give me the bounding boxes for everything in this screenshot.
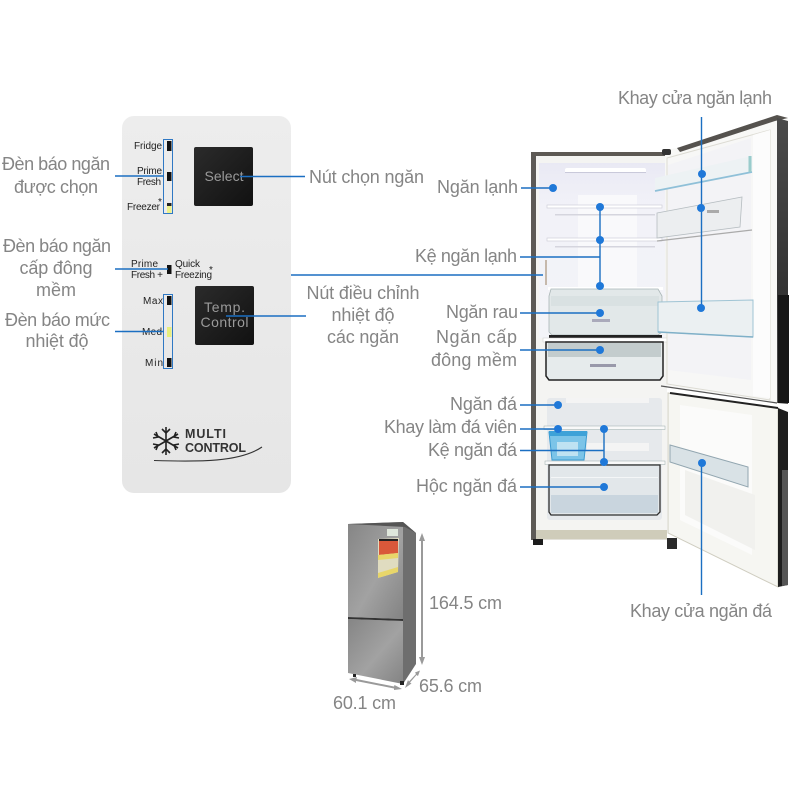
panel labels: compartments [127,141,162,213]
button: Temp. Control: Control [200,314,248,330]
callout: soft freeze indicator: Đèn báo ngăn [3,236,111,256]
callout: fridge door bins: Khay cửa ngăn lạnh [618,88,772,108]
callout: temperature level indicator: nhiệt độ [26,331,88,351]
callout: freezer door bin [630,459,773,621]
callout: vegetable drawer [446,302,604,322]
callout: freezer drawer: Hộc ngăn đá [416,476,518,496]
arrow: depth [405,670,420,688]
callout: freezer compartment [450,394,562,414]
panel labels: prime fresh plus and quick freezing: Fresh + [131,270,163,281]
panel labels: prime fresh plus and quick freezing [131,259,213,281]
panel labels: temperature levels: Max [143,296,163,307]
logo: multi control: MULTI [185,427,226,441]
panel labels: compartments: Freezer [127,202,161,213]
fridge body [531,152,677,549]
logo: multi control [153,427,262,461]
callout: fridge compartment: Ngăn lạnh [437,177,518,197]
callout: temperature level indicator [5,310,164,351]
panel labels: compartments: Prime [137,166,162,177]
label: width: 60.1 cm [333,693,396,713]
small fridge with dimensions [333,522,502,713]
callout: freezer shelves [428,425,608,466]
callout: selected compartment indicator [2,154,164,197]
upper door [661,115,789,404]
callout: ice tray: Khay làm đá viên [384,417,517,437]
prime fresh drawer [543,338,667,380]
panel labels: compartments: Fresh [137,177,161,188]
callout: select button: Nút chọn ngăn [309,167,424,187]
panel labels: prime fresh plus and quick freezing: Freezing [175,270,212,281]
lower door [668,393,788,587]
product sticker [378,529,399,578]
open fridge [531,115,789,587]
callout: vegetable drawer: Ngăn rau [446,302,518,322]
panel: control panel [122,116,291,493]
callout: soft freeze drawer [431,327,604,370]
callout: soft freeze drawer: Ngăn cấp [436,327,517,347]
callout: freezer door bin: Khay cửa ngăn đá [630,601,773,621]
ice drawer [549,465,660,515]
callout: temperature button: Nút điều chỉnh [306,283,420,303]
callout: freezer compartment: Ngăn đá [450,394,518,414]
callout: soft freeze drawer: đông mềm [431,350,517,370]
callout: soft freeze indicator: mềm [36,280,76,300]
indicator lights [167,141,172,367]
door bin: bottom [658,300,753,337]
indicator frames [164,140,172,368]
button: Select: Select [204,168,244,184]
door bin: freezer [670,445,748,487]
button: Temp. Control [195,286,254,345]
vegetable drawer [549,289,662,338]
panel labels: prime fresh plus and quick freezing: Quick [175,259,201,270]
panel labels: compartments: Fridge [134,141,162,152]
logo: multi control: CONTROL [185,441,246,455]
panel labels: temperature levels: Med [142,327,162,338]
connector: control panel to fridge [291,274,543,276]
button: Select [194,147,253,206]
callout: temperature button: các ngăn [327,327,399,347]
callout: fridge shelves [415,203,604,290]
callout: fridge shelves: Kệ ngăn lạnh [415,246,517,266]
callout: freezer drawer [416,476,608,496]
callout: temperature button: nhiệt độ [332,305,394,325]
arrow: width [349,677,402,690]
upper compartment [539,163,665,338]
callout: fridge door bins [618,88,772,312]
lower compartment [544,398,665,520]
callout: soft freeze indicator: cấp đông [20,258,92,278]
button: Temp. Control: Temp. [204,299,245,315]
panel labels: temperature levels [142,296,163,369]
door bin: top [655,156,752,191]
label: height: 164.5 cm [429,593,502,613]
door bin: middle [657,197,752,241]
callout: selected compartment indicator: được chọn [14,177,98,197]
panel labels: prime fresh plus and quick freezing: Prime [131,259,158,270]
panel labels: temperature levels: Min [145,358,163,369]
callout: freezer shelves: Kệ ngăn đá [428,440,518,460]
callout: selected compartment indicator: Đèn báo ngăn [2,154,110,174]
panel labels: prime fresh plus and quick freezing: * [209,265,213,276]
callout: soft freeze indicator [3,236,168,300]
ice tray [549,431,587,460]
label: depth: 65.6 cm [419,676,482,696]
panel labels: compartments: * [158,197,162,208]
callout: temperature button [226,283,420,347]
arrow: height [419,533,425,665]
small fridge [348,522,416,685]
callout: temperature level indicator: Đèn báo mức [5,310,110,330]
callout: fridge compartment [437,177,557,197]
